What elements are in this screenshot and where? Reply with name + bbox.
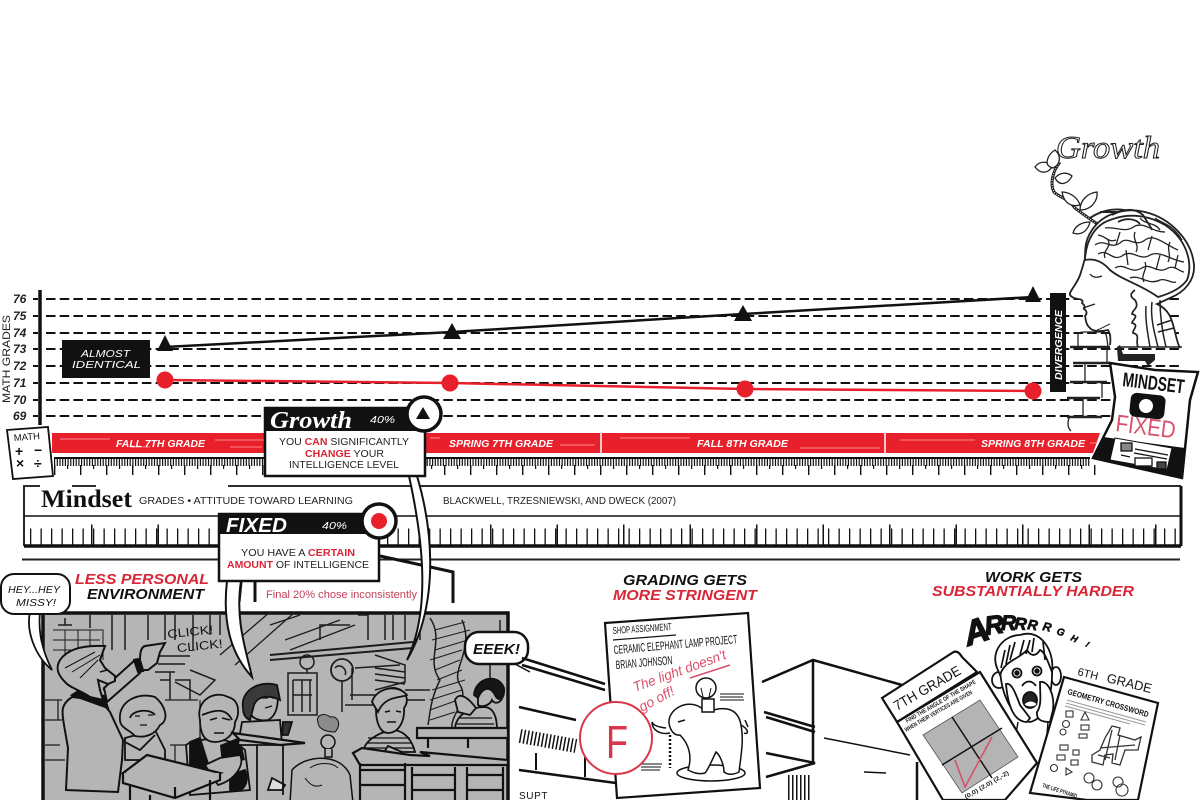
legend card: growth: 40% [370, 415, 395, 426]
sound effect: arrrrgh: R [1014, 614, 1028, 634]
worksheet: 7th grade: WHEN THEIR VERTICES ARE GIVEN [904, 690, 974, 734]
legend card: growth [264, 397, 441, 476]
section heading: grading gets more stringent: GRADING GETS [623, 572, 747, 589]
assignment details: BRIAN JOHNSON [615, 653, 673, 672]
section heading: less personal environment: ENVIRONMENT [87, 586, 206, 603]
growth definition: YOU CAN SIGNIFICANTLY [279, 437, 409, 448]
note: final 20 percent: Final 20% chose inconsistently [266, 589, 417, 601]
worksheet: 6th grade [1030, 666, 1158, 800]
student five [455, 679, 504, 730]
fixed definition: AMOUNT OF INTELLIGENCE [227, 560, 369, 571]
coordinate grid [923, 700, 1018, 793]
y axis: 76 [13, 292, 27, 306]
elephant lamp [290, 735, 353, 800]
sack icon [1129, 392, 1166, 420]
section heading: less personal environment [75, 571, 209, 603]
icon: math card: ÷ [34, 455, 42, 471]
growth mindset line [157, 286, 1041, 351]
legend card: fixed [218, 504, 396, 581]
icon: math card: − [34, 442, 42, 458]
speech bubble: hey missy: MISSY! [16, 598, 56, 609]
panel keywords: GRADES • ATTITUDE TOWARD LEARNING [139, 495, 353, 507]
icon: math card [7, 427, 53, 479]
brick wall [1067, 332, 1110, 431]
sound effect: arrrrgh: R [1041, 619, 1053, 635]
sack details [1121, 443, 1168, 469]
speech bubble: eeek [465, 632, 530, 672]
graded assignment sheet [580, 613, 760, 798]
screaming boy [992, 634, 1061, 745]
vine and leaves [1035, 150, 1135, 234]
assignment heading: SHOP ASSIGNMENT [612, 622, 672, 637]
sound effect: arrrrgh: R [1001, 612, 1017, 635]
classroom background [45, 612, 500, 775]
worksheet: 7th grade: FIND THE ANGLE OF THE SHAPE [905, 680, 977, 725]
growth definition [279, 437, 409, 471]
section heading: grading gets more stringent: MORE STRINGENT [613, 587, 759, 604]
sound effect: click click [167, 622, 223, 656]
sack label: FIXED [1114, 410, 1177, 444]
callout: almost identical: IDENTICAL [72, 359, 141, 371]
fixed label: FIXED [226, 515, 287, 537]
brain [1085, 210, 1189, 347]
citation: BLACKWELL, TRZESNIEWSKI, AND DWECK (2007) [443, 495, 676, 507]
sound effect: click click: CLICK! [167, 622, 214, 641]
assignment details [613, 632, 738, 672]
y axis: 71 [13, 376, 27, 390]
icon: fixed circle [362, 504, 396, 538]
y axis: MATH GRADES [1, 315, 13, 403]
legend card: fixed: 40% [322, 521, 347, 532]
crossword [1092, 726, 1141, 765]
worksheet: 6th grade: GEOMETRY CROSSWORD [1066, 687, 1150, 719]
worksheet: 7th grade: (0,0) (2,0) (2,-2) [964, 771, 1010, 800]
closed eye and mouth [1083, 274, 1102, 308]
speech bubble: eeek: EEEK! [473, 641, 520, 658]
y axis: 73 [13, 342, 27, 356]
small sack tag [1117, 345, 1155, 366]
growth definition: CHANGE YOUR [305, 449, 384, 460]
fixed mindset sack [1093, 345, 1198, 478]
grade: F circle: F [606, 716, 628, 768]
timeline band: FALL 8TH GRADE [697, 438, 789, 450]
fixed definition [227, 548, 369, 571]
y axis [1, 290, 40, 425]
y axis: 74 [13, 326, 27, 340]
section heading: work gets substantially harder: SUBSTANTIALLY HARDER [932, 583, 1134, 600]
student three [238, 684, 292, 790]
worksheet: 7th grade [882, 652, 1037, 800]
teacher [58, 643, 165, 792]
timeline band: FALL 7TH GRADE [116, 438, 206, 450]
callout: almost identical [62, 340, 150, 378]
icon: math card: MATH [13, 431, 40, 444]
teacher comment [631, 646, 730, 715]
worksheet: 6th grade: 6TH [1076, 666, 1099, 683]
student two [186, 695, 250, 795]
timeline band: SPRING 7TH GRADE [449, 438, 554, 450]
timeline band [52, 433, 1100, 453]
section heading: work gets substantially harder [932, 569, 1134, 600]
ruler ticks under timeline [54, 458, 1106, 470]
skull, face and neck [1070, 210, 1194, 348]
teacher comment: go off! [636, 683, 677, 715]
speech bubble: hey missy: HEY...HEY [8, 585, 61, 596]
callout: almost identical: ALMOST [80, 348, 132, 360]
section heading: work gets substantially harder: WORK GETS [985, 569, 1082, 586]
y axis: 69 [13, 409, 27, 423]
sound effect: arrrrgh: ! [1084, 640, 1091, 649]
assignment details: CERAMIC ELEPHANT LAMP PROJECT [613, 632, 738, 657]
sound effect: arrrrgh: G [1055, 626, 1066, 639]
y axis: 72 [13, 359, 27, 373]
speech bubble: hey missy [1, 574, 70, 670]
sound effect: arrrrgh: R [983, 609, 1006, 641]
fixed definition: YOU HAVE A CERTAIN [241, 548, 355, 559]
classroom illustration [43, 476, 508, 800]
callout tail: fixed [226, 581, 252, 677]
timeline band: SPRING 8TH GRADE [981, 438, 1086, 450]
sound effect: click click: CLICK! [176, 637, 223, 655]
icon: math card: + [15, 443, 23, 459]
grade: F circle [580, 702, 652, 774]
desks and chairs [123, 728, 508, 800]
sound effect: arrrrgh: H [1069, 633, 1080, 645]
worksheet: 6th grade: GRADE [1105, 670, 1154, 696]
growth definition: INTELLIGENCE LEVEL [289, 460, 399, 471]
section heading: less personal environment: LESS PERSONAL [75, 571, 209, 588]
icon: growth triangle [407, 397, 441, 431]
elephant lamp drawing [641, 678, 748, 781]
line chart: math grades [1, 286, 1182, 425]
icon: math card: × [16, 455, 24, 471]
head and brain illustration [1035, 129, 1194, 348]
sound effect: arrrrgh [958, 609, 1091, 654]
mindset title: Mindset [41, 486, 133, 513]
geometry icons [1050, 711, 1128, 796]
student one [120, 696, 165, 760]
school building line art [519, 658, 917, 800]
section heading: grading gets more stringent [613, 572, 759, 604]
divider line [22, 558, 1180, 560]
teacher comment: The light doesn't [631, 646, 729, 695]
mindset ruler panel [24, 486, 1181, 546]
sound effect: arrrrgh: R [1027, 616, 1040, 634]
growth title: Growth [1056, 129, 1160, 165]
bushes [317, 715, 339, 732]
student four [363, 688, 415, 756]
fixed mindset line [156, 372, 1042, 400]
worksheet: 7th grade: 7TH GRADE [890, 662, 963, 714]
growth label: Growth [270, 408, 352, 434]
sound effect: arrrrgh: A [958, 610, 994, 654]
callout tail: growth [407, 476, 430, 660]
callout: divergence [1050, 293, 1066, 392]
y axis: 75 [13, 309, 27, 323]
callout: divergence: DIVERGENCE [1053, 309, 1065, 380]
y axis: 70 [13, 393, 27, 407]
